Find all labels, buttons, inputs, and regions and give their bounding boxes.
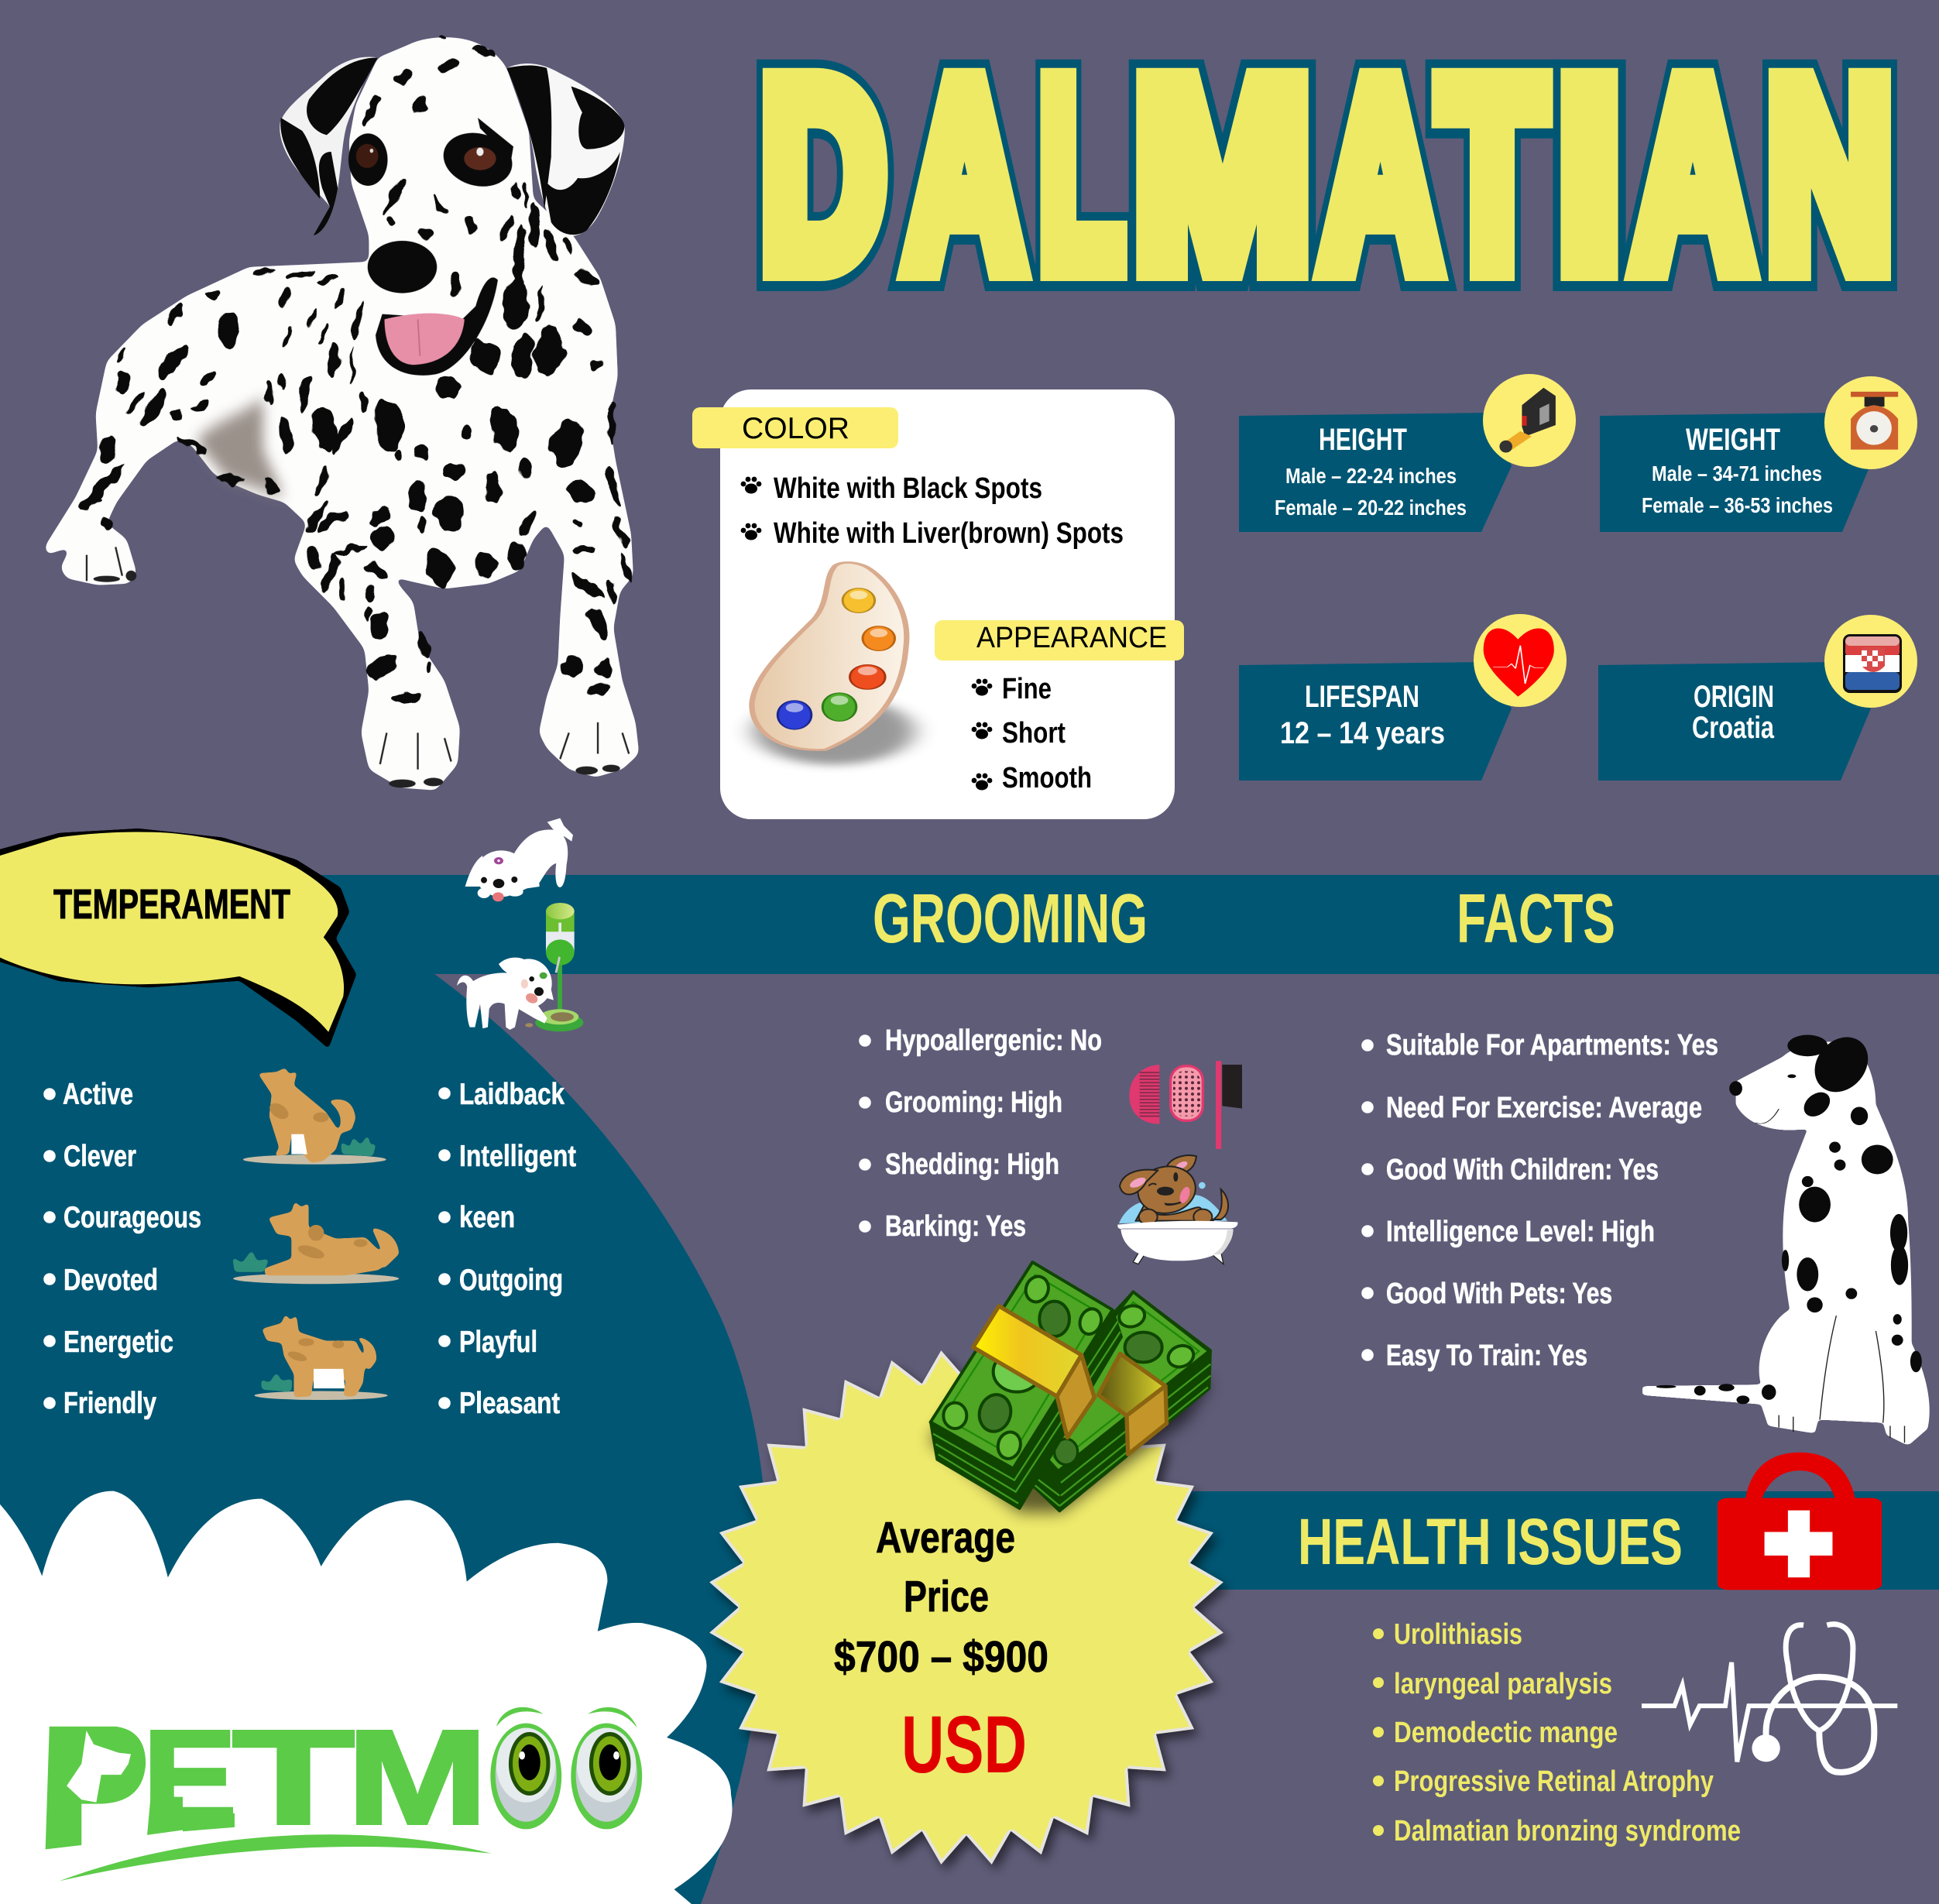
- temperament list right: Pleasant: [459, 1387, 560, 1420]
- appearance list: [972, 673, 1092, 794]
- grooming list: Shedding: High: [885, 1148, 1059, 1181]
- temperament list right: Outgoing: [459, 1264, 563, 1297]
- starburst: average price: [653, 1294, 1280, 1904]
- appearance list: Short: [1002, 717, 1066, 750]
- health list: Progressive Retinal Atrophy: [1394, 1765, 1714, 1798]
- temperament list left: Devoted: [63, 1264, 158, 1297]
- temperament list left: [43, 1078, 201, 1420]
- facts list: Good With Pets: Yes: [1386, 1278, 1612, 1310]
- heading: grooming: GROOMING: [873, 880, 1148, 958]
- appearance list: Smooth: [1002, 762, 1092, 794]
- teal curved panel with grooming band: [0, 852, 1939, 1904]
- starburst: average price: Price: [904, 1572, 989, 1621]
- appearance label: [935, 620, 1184, 660]
- temperament list right: [438, 1078, 576, 1420]
- heading: facts: FACTS: [1457, 880, 1615, 958]
- title: A: [1321, 27, 1440, 323]
- icon: stethoscope with heartbeat: [1642, 1624, 1897, 1772]
- title: D: [761, 27, 885, 323]
- logo: petmoo: [46, 1702, 642, 1881]
- speech bubble: temperament: TEMPERAMENT: [53, 881, 290, 928]
- title: A: [1633, 27, 1752, 323]
- facts list: [1361, 1029, 1718, 1372]
- icon: puppy playing: [465, 818, 573, 901]
- icon: heart with pulse: [1474, 614, 1567, 707]
- facts list: Easy To Train: Yes: [1386, 1340, 1587, 1372]
- logo: petmoo: P: [46, 1702, 147, 1852]
- icon: paint palette: [752, 563, 914, 765]
- panel: lifespan: [1239, 614, 1567, 780]
- temperament list left: Energetic: [63, 1326, 173, 1359]
- panel: lifespan: 12 – 14 years: [1280, 716, 1445, 750]
- panel: color and appearance: [692, 389, 1184, 819]
- panel: weight: Female – 36-53 inches: [1642, 493, 1833, 517]
- panel: height: Female – 20-22 inches: [1275, 496, 1467, 520]
- title: D: [761, 26, 885, 322]
- title: T: [1440, 27, 1545, 323]
- panel: height: Male – 22-24 inches: [1285, 464, 1457, 488]
- health list: Dalmatian bronzing syndrome: [1394, 1815, 1741, 1847]
- title: L: [1039, 26, 1124, 322]
- health list: Demodectic mange: [1394, 1717, 1618, 1749]
- panel: height: HEIGHT: [1319, 423, 1407, 457]
- starburst: average price: USD: [901, 1700, 1027, 1790]
- panel: lifespan: LIFESPAN: [1305, 680, 1419, 714]
- temperament list right: Laidback: [459, 1078, 565, 1111]
- title: M: [1134, 27, 1310, 323]
- color list: White with Black Spots: [774, 472, 1042, 505]
- appearance label: APPEARANCE: [976, 622, 1167, 654]
- icon: kitchen scale: [1824, 376, 1917, 469]
- icon: puppy at feeder: [457, 903, 583, 1031]
- temperament list right: Intelligent: [459, 1140, 576, 1173]
- title: A: [905, 27, 1024, 323]
- temperament list left: Friendly: [63, 1387, 156, 1420]
- logo: petmoo: T: [232, 1702, 355, 1852]
- temperament list left: Active: [63, 1078, 133, 1111]
- logo: petmoo: M: [347, 1702, 488, 1852]
- health list: laryngeal paralysis: [1394, 1668, 1612, 1700]
- color list: [741, 472, 1124, 550]
- speech bubble: temperament: [0, 828, 356, 1049]
- panel: origin: Croatia: [1692, 711, 1775, 745]
- starburst: average price: $700 – $900: [834, 1632, 1048, 1682]
- color list: White with Liver(brown) Spots: [774, 517, 1124, 550]
- title: L: [1039, 27, 1124, 323]
- panel: origin: ORIGIN: [1694, 680, 1774, 714]
- icon: first aid kit: [1718, 1453, 1882, 1590]
- facts list: Intelligence Level: High: [1386, 1216, 1655, 1248]
- facts list: Good With Children: Yes: [1386, 1154, 1659, 1186]
- grooming list: Barking: Yes: [885, 1210, 1026, 1243]
- icon: dog in bathtub: [1117, 1155, 1237, 1264]
- panel: origin: [1598, 615, 1917, 780]
- title: T: [1440, 26, 1545, 322]
- title: I: [1559, 26, 1620, 322]
- icon: Croatia flag: [1824, 615, 1917, 708]
- health issues band: [1162, 1491, 1939, 1590]
- title: I: [1559, 27, 1620, 323]
- big dalmatian photo illustration: [44, 36, 639, 791]
- temperament list left: Clever: [63, 1140, 136, 1173]
- grooming list: [860, 1024, 1102, 1243]
- facts list: Suitable For Apartments: Yes: [1386, 1029, 1718, 1062]
- title: A: [1321, 26, 1440, 322]
- title: M: [1134, 26, 1310, 322]
- title: A: [1633, 26, 1752, 322]
- panel: weight: Male – 34-71 inches: [1652, 461, 1822, 485]
- temperament list right: keen: [459, 1201, 515, 1234]
- panel: weight: [1600, 376, 1917, 532]
- grooming list: Grooming: High: [885, 1086, 1062, 1119]
- title: [761, 26, 1893, 323]
- health list: Urolithiasis: [1394, 1618, 1522, 1651]
- temperament list left: Courageous: [63, 1201, 201, 1234]
- health list: [1373, 1618, 1741, 1847]
- white cloud behind logo: [0, 1491, 733, 1904]
- temperament list right: Playful: [459, 1326, 537, 1359]
- starburst: average price: Average: [876, 1513, 1015, 1563]
- icon: tan dogs: [232, 1068, 399, 1400]
- logo: petmoo: E: [142, 1702, 237, 1852]
- heading: health issues: HEALTH ISSUES: [1298, 1505, 1683, 1578]
- grooming list: Hypoallergenic: No: [885, 1024, 1102, 1057]
- icon: tape measure: [1483, 374, 1576, 467]
- title: A: [905, 26, 1024, 322]
- icon: comb and brush: [1129, 1061, 1242, 1149]
- panel: weight: WEIGHT: [1686, 423, 1780, 457]
- icon: sitting dalmatian cartoon: [1642, 1035, 1930, 1446]
- panel: height: [1239, 374, 1576, 532]
- appearance list: Fine: [1002, 673, 1052, 705]
- facts list: Need For Exercise: Average: [1386, 1092, 1702, 1124]
- color label: COLOR: [742, 412, 849, 445]
- color label: [692, 407, 898, 448]
- icon: stack of money: [929, 1262, 1210, 1512]
